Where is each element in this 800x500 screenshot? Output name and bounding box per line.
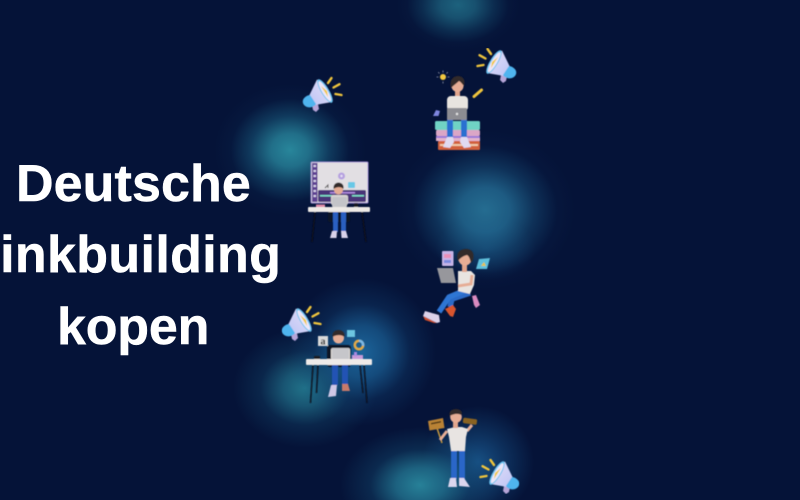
icon: megaphone top right — [478, 48, 516, 83]
figure: person holding sign and binoculars — [428, 409, 477, 487]
title: Deutsche — [16, 155, 251, 213]
figure: person at desk with charts — [306, 330, 372, 403]
figure: person with laptop sitting on books — [433, 70, 482, 150]
title — [0, 155, 281, 356]
figure: person at desk with video editor screen — [308, 162, 370, 242]
figure: person at desk with charts: a — [320, 336, 326, 348]
title: kopen — [57, 298, 209, 356]
icon: megaphone bottom right — [480, 459, 519, 494]
icon: megaphone middle left — [282, 306, 320, 341]
icon: megaphone top left — [303, 77, 342, 112]
figure: person floating with laptop — [423, 249, 490, 323]
